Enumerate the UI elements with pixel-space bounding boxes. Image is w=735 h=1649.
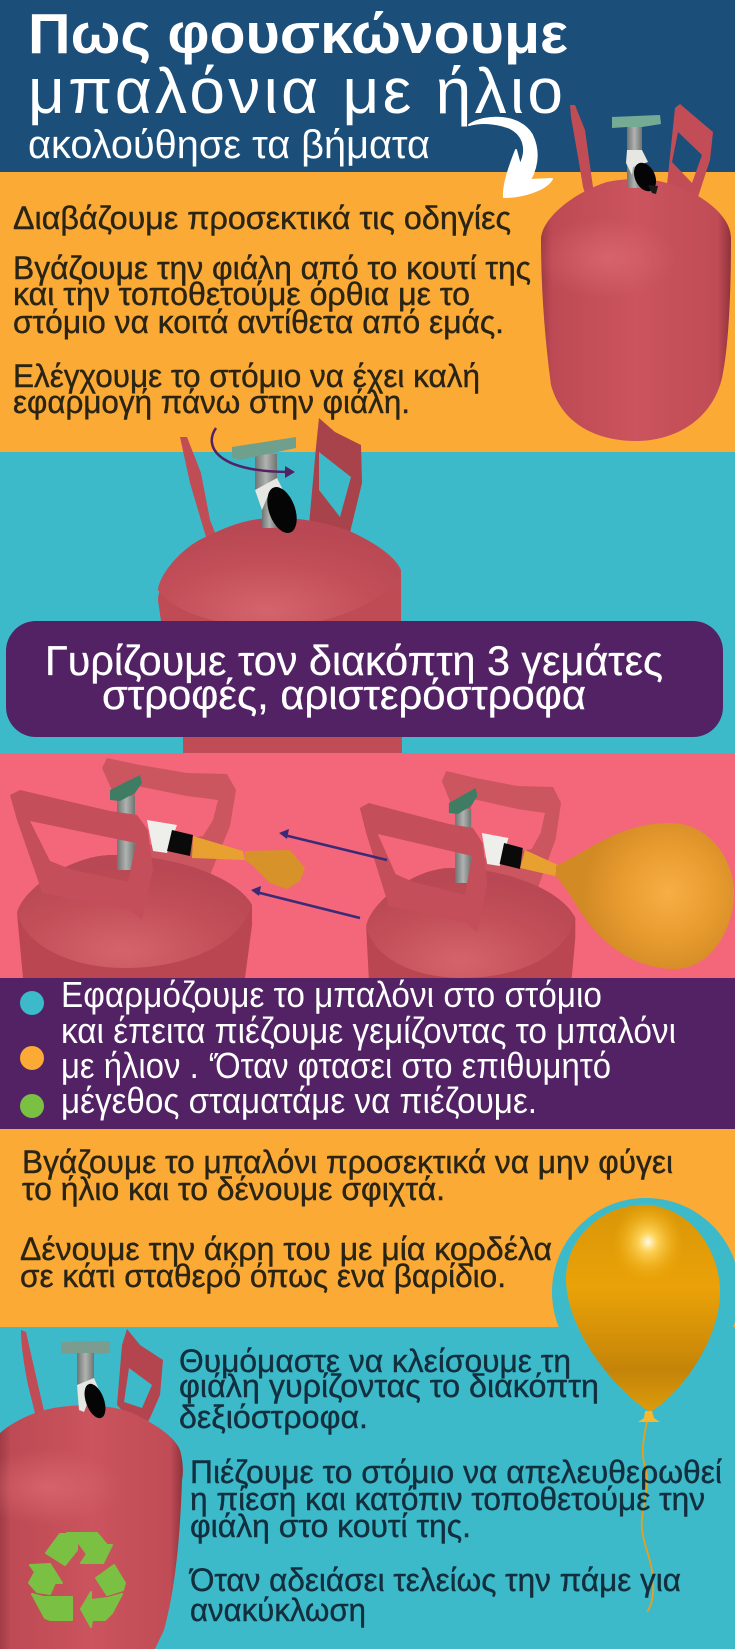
callout: turn the switch (6, 621, 723, 737)
text: tie the balloon: Δένουμε την άκρη του με μία κορδέλα (20, 1231, 552, 1267)
title: Πως φουσκώνουμε (28, 2, 568, 66)
text: fill the balloon: και έπειτα πιέζουμε γεμίζοντας το μπαλόνι (61, 1010, 676, 1051)
text: closing and recycling (179, 1343, 722, 1628)
text: fill the balloon (61, 974, 676, 1121)
text: closing and recycling: η πίεση και κατόπιν τοποθετούμε την (190, 1481, 705, 1517)
text: closing and recycling: Θυμόμαστε να κλείσουμε τη (179, 1343, 571, 1379)
callout: turn the switch: στροφές, αριστερόστροφα (102, 671, 586, 718)
arrow: white curved (469, 118, 552, 197)
icon: recycle (29, 1533, 125, 1627)
text: closing and recycling: φιάλη στο κουτί της. (190, 1508, 471, 1544)
title: ακολούθησε τα βήματα (28, 123, 430, 167)
text: step 1: και την τοποθετούμε όρθια με το (13, 276, 470, 312)
text: step 1: Βγάζουμε την φιάλη από το κουτί της (13, 250, 531, 286)
illustration: gold balloon with ribbon (566, 1202, 720, 1612)
callout: turn the switch: Γυρίζουμε τον διακόπτη 3 γεμάτες (45, 637, 663, 684)
text: fill the balloon: Εφαρμόζουμε το μπαλόνι στο στόμιο (61, 974, 602, 1015)
text: fill the balloon: με ήλιον . ‘Όταν φτασει στο επιθυμητό (61, 1045, 611, 1086)
text: step 1: Διαβάζουμε προσεκτικά τις οδηγίες (13, 200, 511, 236)
illustration: tank with inflated balloon (360, 771, 734, 978)
illustration: helium tank, top right (536, 104, 731, 441)
text: closing and recycling: Πιέζουμε το στόμιο να απελευθερωθεί (190, 1454, 722, 1490)
title (28, 2, 568, 167)
text: closing and recycling: φιάλη γυρίζοντας το διακόπτη (179, 1368, 599, 1404)
text: step 1: Ελέγχουμε το στόμιο να έχει καλή (13, 358, 480, 394)
text: closing and recycling: ανακύκλωση (190, 1592, 366, 1628)
arrow: rotation direction (212, 428, 295, 478)
text: tie the balloon (20, 1144, 673, 1294)
text: step 1 (13, 200, 531, 420)
illustration: tank with deflated balloon (10, 758, 305, 978)
arrow: upper direction (279, 829, 387, 860)
illustration: empty tank, bottom left (0, 1329, 183, 1649)
text: fill the balloon: μέγεθος σταματάμε να πιέζουμε. (61, 1080, 537, 1121)
arrow: lower direction (251, 886, 360, 918)
text: closing and recycling: Όταν αδειάσει τελείως την πάμε για (188, 1562, 681, 1598)
text: closing and recycling: δεξιόστροφα. (179, 1399, 368, 1435)
text: step 1: στόμιο να κοιτά αντίθετα από εμάς. (13, 304, 504, 340)
text: step 1: εφαρμογή πάνω στην φιάλη. (13, 384, 410, 420)
teal halo behind balloon (552, 1198, 735, 1386)
title: μπαλόνια με ήλιο (28, 55, 563, 127)
text: tie the balloon: το ήλιο και το δένουμε σφιχτά. (22, 1171, 445, 1207)
legend dots (20, 991, 44, 1118)
text: tie the balloon: σε κάτι σταθερό όπως ενα βαρίδιο. (20, 1258, 506, 1294)
illustration: helium tank, turning valve (158, 418, 402, 753)
text: tie the balloon: Βγάζουμε το μπαλόνι προσεκτικά να μην φύγει (22, 1144, 673, 1180)
